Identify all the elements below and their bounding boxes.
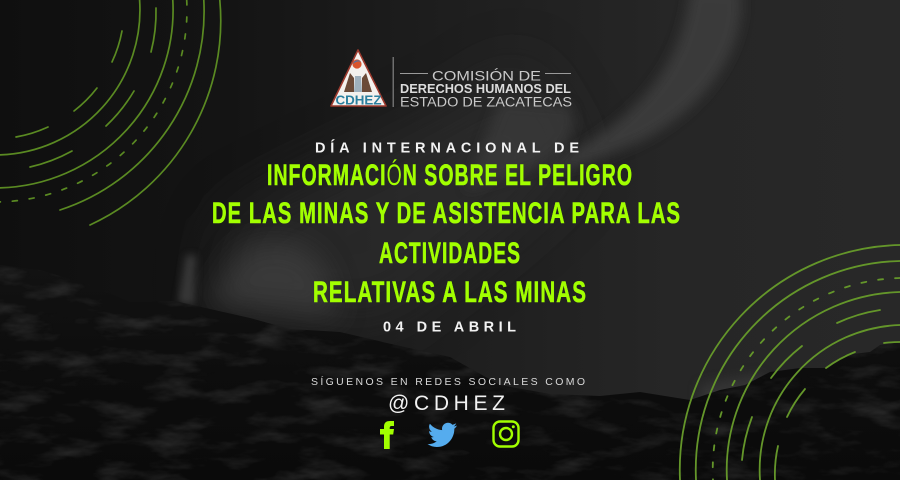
logo text: estado: ESTADO DE ZACATECAS xyxy=(400,94,572,110)
logo rule right xyxy=(545,73,571,74)
background: aurora glow xyxy=(178,0,780,420)
logo: CDHEZ xyxy=(331,50,572,110)
date: 04 DE ABRIL xyxy=(383,320,516,336)
title line 3: ACTIVIDADES xyxy=(379,237,521,270)
title line 4: RELATIVAS A LAS MINAS xyxy=(313,276,587,309)
logo text: derechos humanos: DERECHOS HUMANOS DEL xyxy=(400,81,571,96)
background: mountains xyxy=(0,260,900,480)
logo wordmark CDHEZ: CDHEZ xyxy=(336,92,382,108)
title line 2: DE LAS MINAS Y DE ASISTENCIA PARA LAS xyxy=(212,197,681,230)
decorative rings: bottom right xyxy=(680,245,900,480)
logo rule left xyxy=(400,73,428,74)
logo triangle xyxy=(331,50,386,106)
social handle: @CDHEZ xyxy=(388,392,505,415)
social caption: SÍGUENOS EN REDES SOCIALES COMO xyxy=(311,375,585,388)
title xyxy=(212,159,681,309)
subtitle: DÍA INTERNACIONAL DE xyxy=(315,140,579,156)
logo text: comision: COMISIÓN DE xyxy=(432,68,541,84)
icon: instagram xyxy=(494,422,518,446)
title line 1: INFORMACIÓN SOBRE EL PELIGRO xyxy=(267,159,633,192)
logo divider xyxy=(392,57,394,107)
icon: twitter xyxy=(428,423,457,447)
decorative rings: top left xyxy=(0,0,221,225)
icon: facebook xyxy=(380,421,394,449)
